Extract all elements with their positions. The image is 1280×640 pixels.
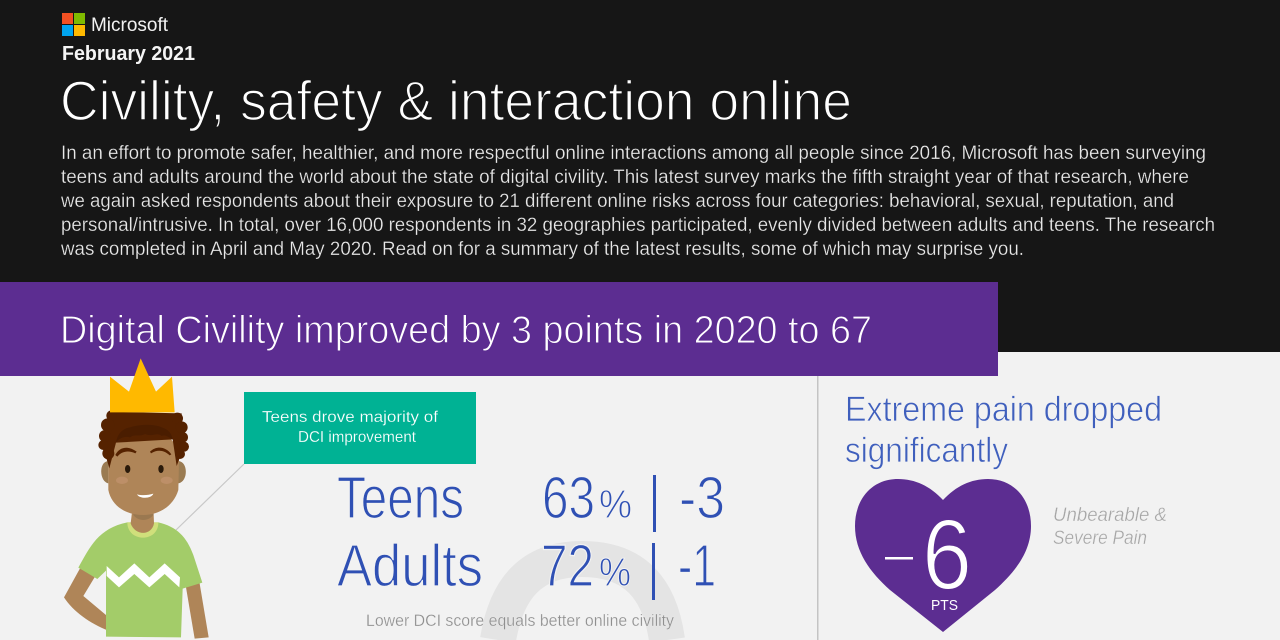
pain label: Unbearable & xyxy=(1053,505,1167,526)
adults row: -1 xyxy=(678,533,716,599)
illustration: teen with crown xyxy=(64,358,209,639)
adults row xyxy=(337,533,716,600)
banner heading: Digital Civility improved by 3 points in 2020 to 67 xyxy=(60,309,872,352)
intro paragraph: teens and adults around the world about the state of digital civility. This latest survey marks the fifth straight year of that research, where xyxy=(61,167,1189,188)
intro paragraph: personal/intrusive. In total, over 16,000 respondents in 32 geographies participated, evenly divided between adults and teens. The research xyxy=(61,215,1215,236)
pain label xyxy=(1053,505,1167,549)
teens row: % xyxy=(599,483,632,527)
callout: teens: Teens drove majority of xyxy=(262,409,439,426)
teens row: 63 xyxy=(542,465,595,531)
arms xyxy=(64,568,110,631)
callout leader line xyxy=(176,464,244,530)
callout: teens xyxy=(244,392,476,464)
intro paragraph: we again asked respondents about their exposure to 21 different online risks across four categories: behavioral, sexual, reputation, and xyxy=(60,191,1174,212)
intro paragraph xyxy=(60,143,1215,260)
date: February 2021 xyxy=(62,43,195,65)
title: Civility, safety & interaction online xyxy=(60,69,852,132)
footnote: Lower DCI score equals better online civility xyxy=(366,611,674,630)
ears xyxy=(101,461,108,483)
brand name: Microsoft xyxy=(91,15,169,36)
icon: Microsoft logo xyxy=(62,13,85,36)
shirt xyxy=(78,522,202,637)
heart stat xyxy=(855,479,1031,632)
face xyxy=(108,430,179,515)
stats table xyxy=(337,465,725,600)
shirt zigzag xyxy=(107,563,180,587)
crown xyxy=(110,358,175,412)
hair xyxy=(98,410,189,468)
adults row: Adults xyxy=(337,533,483,599)
pts label: PTS xyxy=(931,597,958,614)
eyebrows xyxy=(115,448,137,457)
heading: extreme pain: significantly xyxy=(845,431,1008,470)
callout: teens: DCI improvement xyxy=(298,429,417,446)
collar xyxy=(127,522,158,538)
intro paragraph: was completed in April and May 2020. Read on for a summary of the latest results, some of which may surprise you. xyxy=(60,239,1024,260)
header panel xyxy=(0,0,1280,352)
neck xyxy=(131,507,154,533)
teens row xyxy=(337,465,725,532)
hair fringe xyxy=(116,425,173,443)
minus six xyxy=(885,499,972,611)
heading: extreme pain xyxy=(845,390,1162,470)
arch watermark xyxy=(498,559,667,640)
cheeks xyxy=(116,477,128,484)
teens row: Teens xyxy=(337,465,464,531)
adults row: % xyxy=(599,551,631,595)
mouth xyxy=(137,494,153,498)
banner xyxy=(0,282,998,376)
divider xyxy=(817,376,818,640)
eyes xyxy=(125,465,130,473)
heading: extreme pain: Extreme pain dropped xyxy=(845,390,1162,429)
teens row: -3 xyxy=(679,465,725,531)
pain label: Severe Pain xyxy=(1053,528,1147,549)
minus six: 6 xyxy=(922,499,972,611)
adults row: 72 xyxy=(541,533,594,599)
intro paragraph: In an effort to promote safer, healthier, and more respectful online interactions among all people since 2016, Microsoft has been surveying xyxy=(61,143,1206,164)
